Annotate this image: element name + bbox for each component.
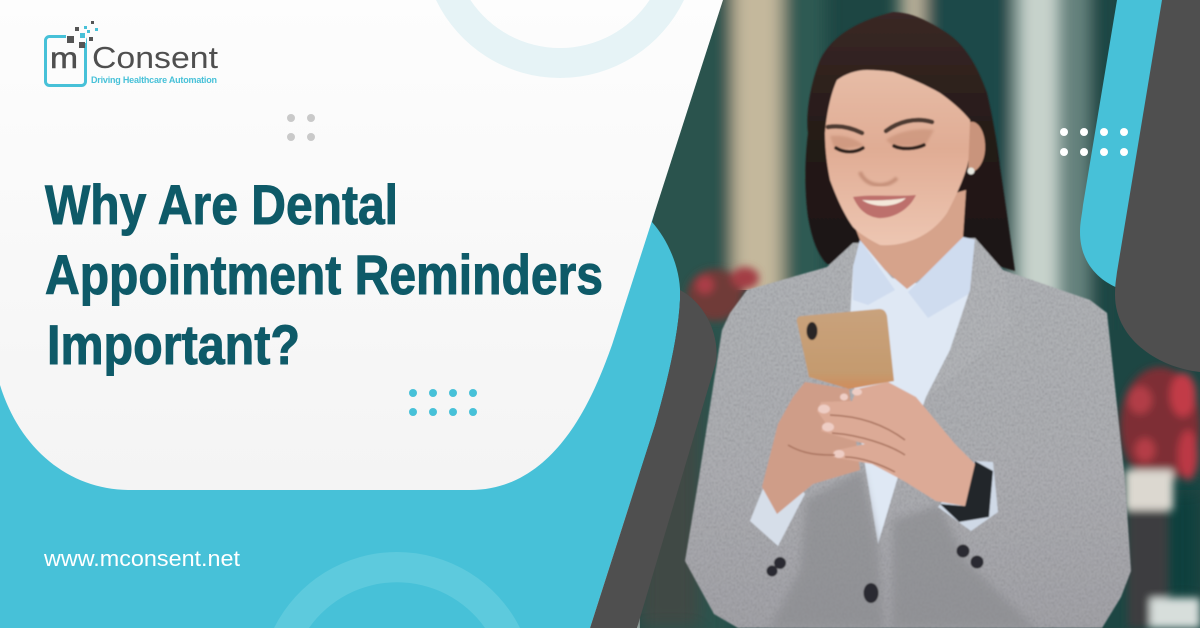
right hand [817,382,975,506]
panel: dark gray sweep [590,290,717,628]
title: Important? [47,313,300,376]
eyebrows [828,120,932,133]
title: Why Are Dental [45,173,398,236]
website url: www.mconsent.net [43,546,240,571]
neck [853,190,966,289]
panel: teal bottom shape [0,200,680,628]
logo: m: m [50,42,78,75]
blazer [685,238,1131,628]
dots: teal cluster [409,389,477,416]
logo: mConsent [46,21,218,86]
logo: tablet frame [46,36,86,86]
left cuff [750,461,805,546]
finger lines [788,415,905,472]
face [825,70,971,245]
logo: Consent: Consent [92,40,218,75]
left hand [762,382,860,514]
panel: teal top-right strip [1080,0,1165,288]
title [45,173,603,376]
jacket lapel [926,238,1012,397]
fingernails [818,388,862,458]
ring: top decorative arc [436,0,684,78]
jacket shade [770,470,1035,628]
dots: white cluster [1060,128,1128,156]
panel: white title card [0,0,723,490]
nose shadow [860,172,897,185]
watch [940,461,993,522]
phone [797,309,894,389]
right cuff [938,461,998,531]
logo: pixel squares [66,21,98,48]
eye shadow [830,129,934,150]
photo: woman holding smartphone [685,12,1131,628]
dots: gray cluster [287,114,315,141]
photo: blurred street background [640,0,1200,628]
hair [805,12,1015,271]
eyes [836,145,924,152]
ring: bottom decorative arc [274,552,520,628]
shirt [850,237,977,544]
phone camera [806,322,818,340]
panel: dark gray top-right shape [1115,0,1200,372]
logo: tagline: Driving Healthcare Automation [91,75,217,85]
ear and earring [968,122,985,174]
jacket buttons [766,544,984,603]
collar [853,237,976,318]
title: Appointment Reminders [45,243,603,306]
smile [853,195,916,218]
